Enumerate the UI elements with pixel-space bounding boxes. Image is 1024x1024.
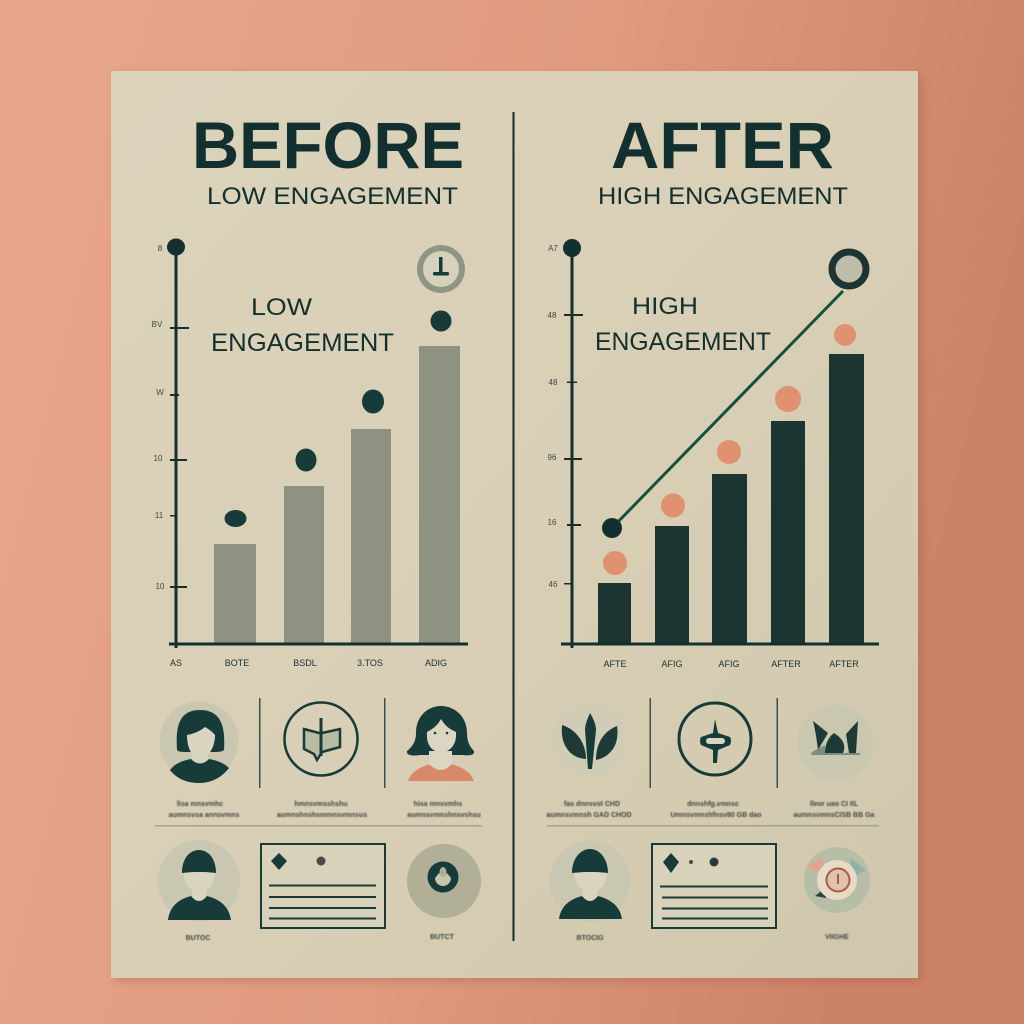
icon: person avatar	[550, 840, 630, 922]
captions row two	[186, 934, 455, 942]
chart label: low engagement: ENGAGEMENT	[211, 329, 394, 357]
separator	[155, 825, 482, 826]
divider	[384, 698, 386, 788]
subheading: low engagement: LOW ENGAGEMENT	[207, 183, 458, 210]
captions row two	[576, 934, 849, 942]
x labels: AS	[170, 658, 182, 668]
icon: round badge	[407, 844, 481, 918]
dots above bars	[224, 310, 452, 527]
y axis: 10	[154, 454, 163, 463]
icon: clock	[417, 245, 465, 293]
captions row two: VIIGHE	[825, 934, 849, 941]
x labels: AFIG	[661, 659, 683, 669]
icon: compass in circle	[679, 703, 751, 775]
divider	[259, 698, 260, 788]
captions row one: aumnsvmnsCISB BB Ga	[794, 812, 875, 819]
panel: after icons	[546, 698, 879, 942]
x labels: AFIG	[718, 659, 740, 669]
y axis: 8	[158, 244, 163, 253]
x labels	[170, 658, 447, 668]
captions row one: aumnsvmnshnsvshsu	[407, 812, 481, 819]
x labels: ADIG	[425, 658, 447, 668]
heading: after: AFTER	[611, 108, 834, 182]
x labels	[603, 659, 859, 669]
captions row two: BUTOC	[186, 935, 210, 942]
y axis: 46	[549, 580, 558, 589]
heading: before: BEFORE	[192, 108, 464, 182]
poster shadow	[115, 74, 923, 982]
x labels: AFTER	[771, 659, 801, 669]
subheading: high engagement: HIGH ENGAGEMENT	[598, 183, 848, 210]
line start dot	[602, 518, 622, 538]
center divider	[512, 112, 514, 941]
bars	[598, 354, 864, 644]
captions row one: hmnsvmsshshu	[294, 801, 348, 808]
y axis: 48	[548, 311, 557, 320]
bars	[214, 346, 460, 644]
baseline	[561, 642, 879, 646]
x labels: BOTE	[225, 658, 249, 668]
icon: document card	[652, 844, 776, 928]
captions row one: aumnsvmnsh GAD CHOD	[546, 812, 632, 819]
icon: target ring	[832, 252, 866, 286]
icon: mountains	[797, 705, 873, 781]
chart label: low engagement: LOW	[251, 294, 312, 321]
divider	[776, 698, 778, 788]
y axis: 16	[548, 518, 557, 527]
baseline	[169, 642, 468, 646]
icon: shield in circle	[284, 702, 358, 776]
captions row two: BUTCT	[430, 934, 455, 941]
icon: person avatar	[158, 840, 240, 922]
y axis: A7	[548, 244, 558, 253]
panel: after chart	[548, 239, 879, 669]
captions row one: aumnshnshsmmnsvmnsus	[277, 812, 367, 819]
icon: woman avatar dark	[160, 702, 238, 783]
chart label: high engagement: ENGAGEMENT	[595, 328, 771, 356]
y axis: 10	[156, 582, 165, 591]
y axis: 48	[549, 378, 558, 387]
y axis	[152, 238, 189, 648]
icon: colorful badge	[804, 847, 870, 913]
captions row one: lisa mnsvmhc	[177, 801, 223, 808]
y axis: 11	[155, 511, 164, 520]
dots above bars	[603, 324, 856, 575]
divider	[650, 698, 651, 788]
y axis: 96	[548, 453, 557, 462]
captions row one	[169, 801, 481, 819]
captions row one	[546, 801, 875, 819]
captions row one: Umnsvmnshfnsv80 GB dao	[670, 812, 762, 819]
x labels: BSDL	[293, 658, 317, 668]
icon: document card	[261, 844, 385, 928]
icon: woman avatar orange	[407, 706, 474, 781]
captions row one: dnnshfg.vmnsc	[687, 801, 739, 808]
chart label: high engagement	[595, 293, 771, 356]
poster panel	[111, 71, 918, 978]
y axis	[548, 239, 583, 648]
captions row one: fas dnnsvst CHD	[564, 801, 620, 808]
panel: before icons	[155, 698, 482, 942]
chart label: high engagement: HIGH	[632, 293, 698, 320]
separator	[547, 825, 879, 826]
captions row one: lleor uao CI IIL	[810, 801, 859, 808]
y axis: W	[156, 388, 164, 397]
x labels: 3.TOS	[357, 658, 383, 668]
captions row one: hisa mnsvmhs	[414, 801, 462, 808]
x labels: AFTE	[603, 659, 627, 669]
y axis: BV	[152, 320, 163, 329]
x labels: AFTER	[829, 659, 859, 669]
icon: leaves	[552, 702, 628, 778]
captions row two: BTOCIG	[576, 935, 604, 942]
trend line	[612, 291, 843, 528]
panel: before chart	[152, 238, 468, 668]
captions row one: aumnsvsa annsvmns	[169, 812, 240, 819]
chart label: low engagement	[211, 294, 394, 357]
